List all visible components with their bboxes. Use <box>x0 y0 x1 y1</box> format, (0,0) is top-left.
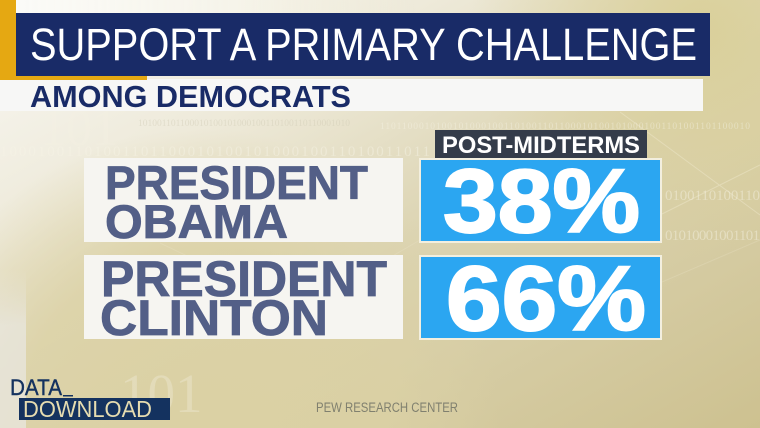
row label: President Obama: PRESIDENT <box>105 156 368 209</box>
column label: post-midterms: POST-MIDTERMS <box>442 132 640 159</box>
background binary digits: 01010001001101 <box>665 228 760 244</box>
row label: President Clinton <box>84 251 403 346</box>
row label: President Clinton: CLINTON <box>100 290 328 346</box>
row label: President Obama <box>84 156 403 248</box>
subtitle text: AMONG DEMOCRATS <box>30 79 351 114</box>
title banner <box>16 13 710 76</box>
value: 38%: 38% <box>443 152 640 252</box>
row label: President Clinton: PRESIDENT <box>101 251 387 307</box>
background binary digits: 101001101100010100101000100110100110110001010 <box>138 119 350 129</box>
source: PEW RESEARCH CENTER <box>316 400 458 415</box>
top white strip <box>16 0 416 13</box>
background binary digits: 1000100110100110110001010010100010011010011011 <box>0 144 430 160</box>
background binary digits <box>0 100 760 424</box>
background binary digits: 110110001010010100010011010011011000101001010001001101001101100010 <box>380 122 750 132</box>
logo: Data Download <box>10 375 170 422</box>
subtitle bar <box>0 79 703 114</box>
background binary digits: 0100110100110 <box>665 188 760 204</box>
logo: Data Download: DATA <box>10 375 62 400</box>
gold accent <box>0 0 147 80</box>
logo: Data Download: DOWNLOAD <box>23 396 152 422</box>
background binary digits: 101 <box>40 100 118 157</box>
value: 66%: 66% <box>446 248 646 350</box>
row label: President Obama: OBAMA <box>105 195 288 248</box>
background binary digits: 101 <box>120 363 202 424</box>
